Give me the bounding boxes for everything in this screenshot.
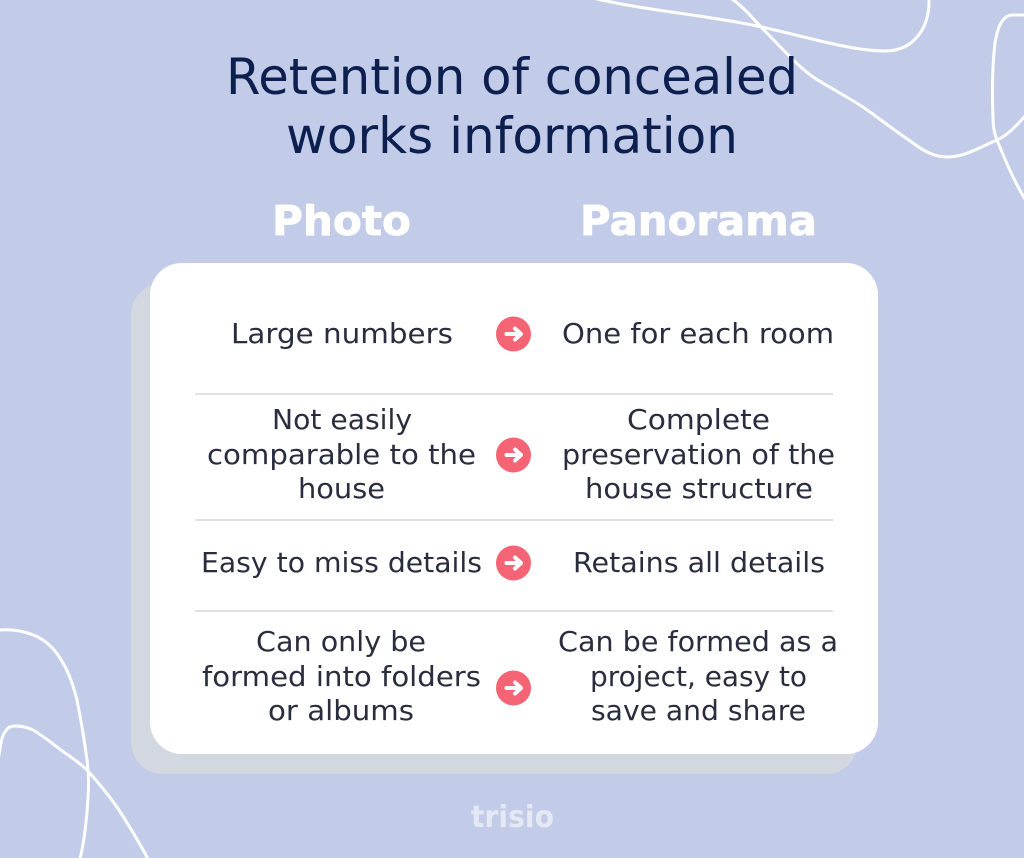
decorative curves: bottom left: [0, 630, 148, 858]
card shadow: [131, 283, 858, 774]
row 4: formed into folders: [202, 661, 481, 693]
title: [226, 48, 798, 165]
row 4: save and share: [591, 695, 806, 727]
row 4: project, easy to: [590, 661, 807, 693]
row 4: [202, 626, 838, 727]
row 1: Large numbers: [231, 318, 453, 350]
column heading: Photo: Photo: [272, 197, 411, 245]
icon: arrow row 4: [496, 670, 531, 706]
row 2: preservation of the: [562, 439, 835, 471]
row 2: house: [298, 473, 385, 505]
row 2: [207, 404, 835, 505]
row 1: One for each room: [562, 318, 834, 350]
row 1: [231, 318, 834, 350]
row 2: house structure: [585, 473, 813, 505]
row 2: Complete: [627, 404, 770, 436]
row 4: Can be formed as a: [558, 626, 838, 658]
row 4: or albums: [268, 695, 414, 727]
icon: arrow row 3: [496, 546, 531, 580]
row 3: [201, 547, 825, 579]
row 3: Easy to miss details: [201, 547, 482, 579]
icon: arrow row 1: [496, 316, 531, 352]
row 3: Retains all details: [573, 547, 825, 579]
title: works information: [286, 107, 738, 165]
row 4: Can only be: [256, 626, 426, 658]
logo: trisio: trisio: [471, 800, 554, 835]
comparison card: [150, 263, 878, 754]
icon: arrow row 2: [496, 438, 531, 472]
column heading: Panorama: Panorama: [580, 197, 817, 245]
row 2: Not easily: [272, 404, 412, 436]
decorative curves: top right: [597, 0, 1024, 199]
title: Retention of concealed: [226, 48, 798, 106]
row 2: comparable to the: [207, 439, 476, 471]
